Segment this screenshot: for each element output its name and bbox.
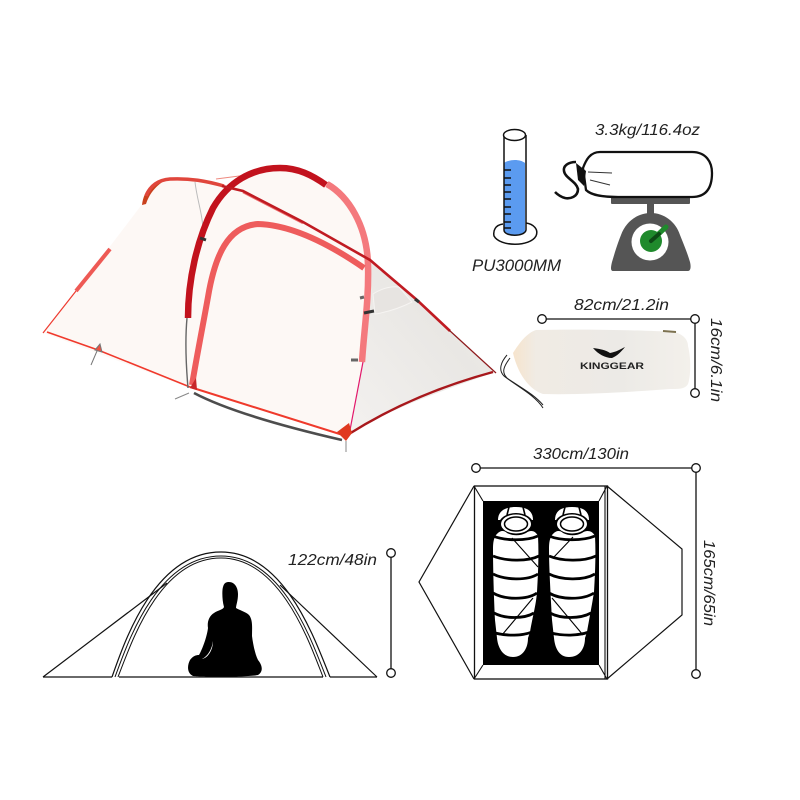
dimension lines for footprint (472, 464, 700, 678)
label: packed length: 82cm/21.2in (574, 297, 669, 314)
scale platform (611, 196, 690, 204)
label: footprint width: 165cm/65in (700, 540, 717, 626)
label: packed diameter: 16cm/6.1in (707, 318, 724, 402)
black floor (483, 501, 599, 665)
rear top band (142, 179, 167, 205)
sack gather lines (588, 172, 612, 185)
right bag hood ring (555, 513, 589, 535)
corner peg (175, 393, 346, 452)
middle arc (115, 556, 326, 677)
right bag pillow (555, 507, 589, 520)
corner patch front (337, 423, 352, 441)
right guy line (280, 585, 377, 677)
pink side pole (350, 362, 363, 430)
scale body (611, 213, 691, 271)
tent photo (43, 166, 496, 452)
label: weight: 3.3kg/116.4oz (595, 122, 700, 139)
left bag pillow (498, 507, 533, 520)
main arch dark (188, 168, 326, 318)
scale green centre (640, 230, 662, 252)
support cord (195, 182, 203, 232)
rear peg (91, 344, 102, 365)
tent side wing (350, 258, 495, 432)
corner patch left (190, 378, 197, 390)
pole left lower (186, 318, 188, 388)
right bag body (549, 531, 595, 657)
brand name: KINGGEAR (580, 361, 644, 372)
left bag quilting (493, 536, 539, 635)
cylinder base (494, 223, 537, 244)
ridge tail (449, 330, 496, 373)
sack shape (513, 330, 690, 394)
dimension lines for pack (538, 315, 699, 397)
seated person silhouette (188, 582, 262, 677)
label: waterproof rating: PU3000MM (472, 257, 561, 275)
ridge strip (243, 192, 303, 223)
scale dial (632, 224, 668, 260)
rear base line (47, 332, 190, 387)
sack tag (663, 331, 676, 332)
floor plan diagram (419, 486, 682, 679)
left bag hood ring (499, 513, 533, 535)
cylinder glass (504, 135, 526, 235)
lower right edge (349, 372, 493, 434)
dimension line for height (387, 549, 395, 677)
double wall line (474, 486, 607, 679)
ground lines (43, 676, 377, 678)
stuff sack on scale (555, 152, 712, 198)
left guy line (43, 583, 167, 677)
right bag quilting (549, 536, 596, 635)
wing mesh window (373, 287, 412, 314)
sack body (583, 152, 712, 197)
ridge line (222, 186, 450, 331)
label: interior height: 122cm/48in (288, 552, 377, 569)
ground shadow band (194, 393, 342, 440)
cylinder scale (504, 170, 511, 228)
scale neck (647, 203, 654, 215)
outer arc (112, 552, 330, 677)
right sleeping bag (549, 507, 596, 657)
inner tent outline (474, 486, 608, 679)
cylinder mouth (504, 130, 526, 140)
door arch (192, 224, 364, 385)
sack cord (501, 355, 543, 408)
packed tent sack (501, 330, 690, 408)
left bag body (493, 531, 538, 657)
front base line (190, 387, 346, 436)
sack knot and cord (555, 162, 578, 198)
rear left edge (43, 291, 76, 333)
inner arc (118, 558, 323, 677)
left sleeping bag (493, 507, 539, 657)
cylinder icon (494, 130, 537, 244)
rear cord (216, 175, 247, 179)
right bag zip lines (552, 537, 583, 635)
side view tent diagram (43, 552, 377, 677)
label: footprint length: 330cm/130in (533, 446, 629, 463)
vestibule outline (419, 486, 682, 679)
tent body (44, 166, 372, 437)
scale icon (611, 196, 691, 271)
scale needle (651, 227, 666, 241)
brand logo bird (593, 347, 625, 358)
left bag zip lines (502, 538, 538, 635)
side pegs (351, 297, 364, 360)
main arch pink (327, 184, 368, 362)
cylinder water (504, 160, 525, 235)
clips (200, 238, 419, 313)
rear guy panel (76, 249, 110, 291)
